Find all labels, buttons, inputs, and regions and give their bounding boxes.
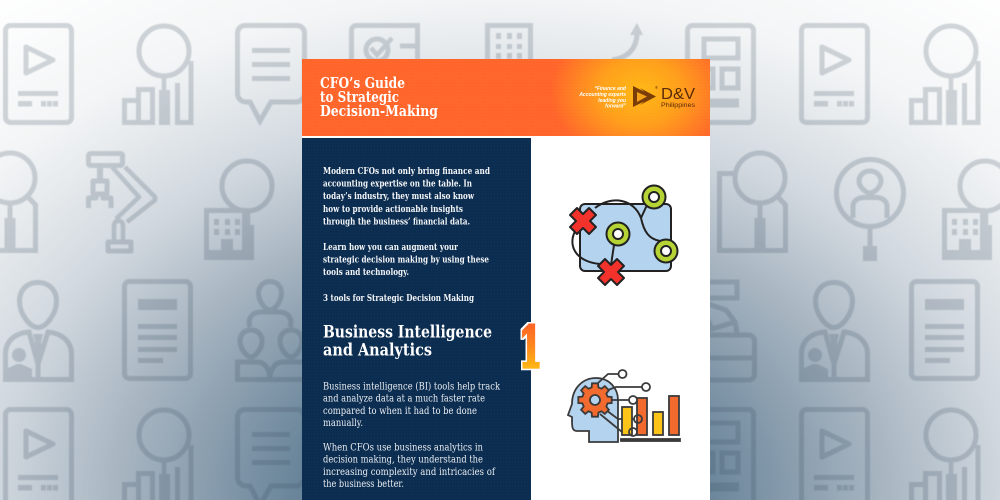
icon: magnifier over building, row 2 <box>204 161 272 260</box>
icon: hand and box, row 3 right <box>690 282 754 380</box>
icon: magnifier over building, row 2 right <box>942 161 1000 260</box>
icon: person in suit, row 3 <box>6 282 72 382</box>
section body text: compared to when it had to be done <box>323 406 477 417</box>
intro paragraph: today’s industry, they must also know <box>323 191 475 202</box>
icon: map with route <box>570 186 678 285</box>
tools line: 3 tools for Strategic Decision Making <box>323 293 474 304</box>
tagline: “Finance and <box>594 86 627 92</box>
numeral 1: 1 <box>519 315 542 381</box>
icon: report document, row 3 <box>124 282 190 378</box>
tagline: leading you <box>598 98 626 104</box>
section body text: decision making, they understand the <box>323 454 483 466</box>
second paragraph: strategic decision making by using these <box>323 254 489 266</box>
icon: office building, row 1 <box>488 26 530 86</box>
tagline: forward” <box>605 104 626 110</box>
icon: magnifier over document, row 2 left <box>0 153 36 253</box>
icon: magnifier with bar chart, row 4 <box>124 410 191 500</box>
icon: report document, row 3 right <box>912 282 978 378</box>
icon: magnifier with bar chart, row 4 right <box>912 410 978 500</box>
icon: person in suit, row 3 right <box>802 282 868 382</box>
section heading: Business Intelligence <box>323 322 492 342</box>
section body text: increasing complexity and intricacies of <box>323 467 496 478</box>
icon: robot arm <box>88 154 155 251</box>
icon: magnifier with bar chart, row 1 right <box>912 26 978 125</box>
icon: speech bubble, row 4 <box>237 410 305 500</box>
second paragraph: tools and technology. <box>323 267 409 278</box>
second paragraph: Learn how you can augment your <box>323 242 459 253</box>
tagline: Accounting experts <box>578 92 626 98</box>
section body text <box>323 382 501 490</box>
tagline <box>578 86 627 110</box>
intro paragraph: Modern CFOs not only bring finance and <box>323 166 490 177</box>
intro paragraph: accounting expertise on the table. In <box>323 178 472 190</box>
logo: D&V Philippines: ® <box>655 85 658 90</box>
icon: checklist document, row 1 <box>351 25 418 70</box>
intro paragraph: through the business’ financial data. <box>323 216 470 228</box>
second paragraph <box>323 242 489 278</box>
panel: navy text column <box>302 138 531 500</box>
title: to Strategic <box>320 88 399 106</box>
section body text: manually. <box>323 418 363 429</box>
icon: speech bubble, row 1 <box>237 26 305 121</box>
section body text: Business intelligence (BI) tools help track <box>323 382 501 392</box>
icon: video document, row 1 right <box>802 26 868 122</box>
panel: document page <box>302 59 710 500</box>
icon: video document, row 1 <box>6 26 72 122</box>
title: CFO’s Guide <box>320 74 405 92</box>
icon: magnifier with bar chart, row 1 <box>124 26 191 125</box>
title <box>320 74 438 120</box>
icon: head with gear and bar chart <box>568 370 680 442</box>
icon: rising arrow, row 1 <box>612 23 643 60</box>
title: Decision-Making <box>320 102 438 120</box>
section heading: and Analytics <box>323 340 432 360</box>
logo: D&V Philippines: Philippines <box>661 102 696 109</box>
icon: group of people, row 3 <box>238 282 310 380</box>
icon: video document, row 4 right <box>802 410 868 500</box>
section body text: the business better. <box>323 479 404 490</box>
icon: video document, row 4 <box>6 410 72 500</box>
panel: header banner <box>302 59 710 136</box>
section body text: and analyze data at a much faster rate <box>323 394 485 404</box>
icon: newspaper, row 4 <box>688 410 754 500</box>
logo: D&V Philippines: D&V <box>661 86 696 103</box>
icon: newspaper, row 1 <box>688 26 754 122</box>
icon: magnifier with person <box>836 160 904 261</box>
intro paragraph: how to provide actionable insights <box>323 204 463 215</box>
section heading <box>323 322 492 360</box>
icon: magnifier over document, row 2 right <box>720 153 786 253</box>
intro paragraph <box>323 166 490 228</box>
logo: D&V Philippines <box>633 85 696 109</box>
section body text: When CFOs use business analytics in <box>323 442 483 454</box>
